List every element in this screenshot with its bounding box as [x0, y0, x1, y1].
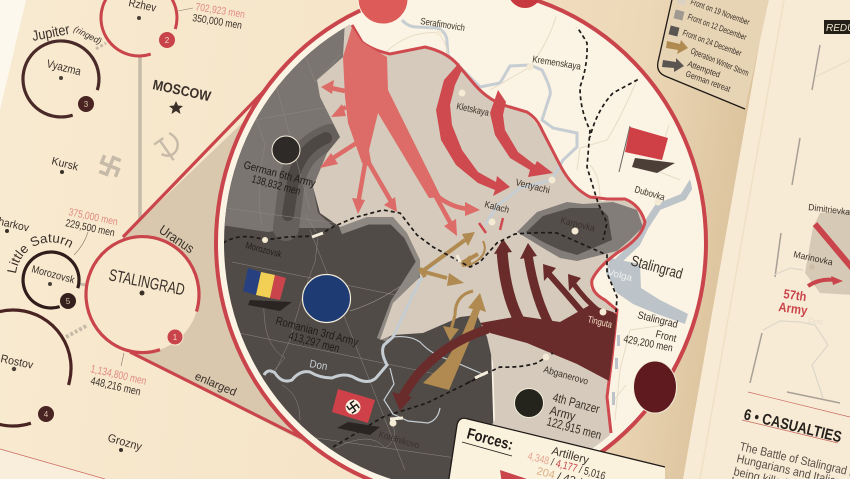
Rzhev casualties: [178, 1, 246, 32]
enlargement wedge from Stalingrad to the big map: [123, 10, 362, 445]
railway crossing marks: [312, 233, 488, 419]
flag: Soviet Union: [619, 126, 675, 173]
Stalingrad pocket at Karpovka: [517, 202, 643, 261]
map labels: Kletskaya: [455, 101, 491, 119]
icon: swastika in gray: [98, 154, 122, 178]
army label: 4th Panzer Army: Army: [548, 403, 578, 424]
army label: Stalingrad Front: Front: [654, 328, 678, 345]
flag: Nazi Germany: [332, 389, 380, 435]
legend labels: Front on 12 December: [686, 11, 748, 42]
Soviet offensive north trunk with branches: [320, 27, 480, 236]
Rzhev circle: 2: [165, 36, 170, 45]
Kursk: Kursk: [50, 155, 80, 174]
6th Army pocket finger: [286, 137, 330, 228]
Little Saturn casualties: [64, 206, 119, 255]
Chir tributaries: [384, 337, 485, 423]
Little Saturn casualties: 229,500 men: [64, 217, 116, 239]
Soviet Kletskaya arcs: [436, 63, 553, 196]
Stalingrad circle: Uranus: [156, 222, 197, 256]
Vyazma circle: Jupiter: [31, 22, 71, 45]
Stalingrad circle: [86, 222, 199, 353]
Rostov circle: Rostov: [0, 353, 34, 372]
Forces panel: Artillery: [550, 445, 590, 467]
Vyazma circle: Vyazma: [45, 58, 83, 79]
army marker: Romanian 3rd Army: [302, 274, 350, 322]
army label: 4th Panzer Army: 122,915 men: [545, 414, 603, 442]
strategic connector lines: [66, 43, 140, 337]
army label: Romanian 3rd Army: Romanian 3rd Army: [274, 315, 360, 349]
map grid and roads on dark terrain: [225, 55, 470, 470]
Don river: [264, 263, 437, 382]
town markers: [262, 30, 662, 426]
Stalingrad city label: Stalingrad: [629, 252, 685, 283]
legend box: [658, 0, 770, 109]
Stalingrad casualties and enlarged note: 448,216 men: [89, 375, 142, 398]
army label: Stalingrad Front: 429,200 men: [622, 333, 674, 355]
right page: pocket map: 57th: [783, 286, 807, 304]
front on 12 December gray area: [224, 25, 349, 232]
map labels: Vertyachi: [514, 177, 551, 196]
legend labels: [681, 0, 751, 94]
Vyazma circle: [23, 22, 103, 117]
Moscow label and star: MOSCOW: [151, 76, 213, 104]
Rostov circle: [0, 310, 71, 426]
legend labels: Attempted: [686, 58, 722, 80]
Morozovsk circle: Morozovsk: [30, 263, 76, 286]
Little Saturn casualties: 375,000 men: [67, 206, 119, 228]
map labels: Dubovka: [633, 184, 667, 204]
big map disc ring: [216, 0, 706, 479]
map labels: Kotelnikovo: [377, 429, 421, 451]
tan front on 19 November: [313, 20, 645, 479]
army label: German 6th Army: 138,832 men: [250, 173, 302, 198]
right page: reduced map edge: [750, 45, 850, 403]
Winter Storm tan arrows: [420, 232, 486, 390]
army marker: German 6th Army: [272, 136, 300, 164]
right page: casualties section: [729, 392, 850, 479]
right page: pocket map: Marinovka: [793, 249, 834, 267]
map labels: Tinguta: [586, 314, 614, 331]
army marker: 4th Panzer Army: [514, 388, 544, 418]
Volga river: [606, 180, 692, 405]
legend labels: Operation Winter Storm: [689, 46, 750, 78]
Rzhev casualties: 702,923 men: [195, 1, 246, 21]
northern Don river: [402, 20, 577, 225]
map labels: Kalach: [483, 199, 510, 216]
army label: German 6th Army: German 6th Army: [242, 159, 317, 190]
army label: Stalingrad Front: [622, 309, 679, 355]
army label: 4th Panzer Army: 4th Panzer: [551, 390, 601, 416]
Stalingrad circle: STALINGRAD: [107, 266, 186, 299]
legend swatches: [662, 0, 688, 72]
army label: Stalingrad Front: Stalingrad: [636, 309, 679, 331]
Soviet front line: [352, 25, 645, 433]
Morozovsk circle: Little Saturn: [7, 234, 72, 273]
Forces panel: [448, 418, 665, 479]
map labels: Don: [308, 358, 328, 373]
legend labels: Front on 24 December: [681, 27, 743, 58]
pale roads on the white area: [386, 8, 680, 420]
Vyazma circle: 3: [84, 100, 89, 109]
map labels: Kremenskaya: [532, 54, 582, 73]
army label: Romanian 3rd Army: 413,297 men: [287, 330, 341, 355]
army marker: Stalingrad Front: [634, 361, 676, 413]
icon: hammer and sickle: [152, 131, 180, 160]
map labels: Volga: [606, 267, 634, 284]
Stalingrad casualties and enlarged note: enlarged: [193, 371, 238, 399]
Morozovsk circle: 5: [66, 297, 71, 306]
right page: pocket map: [763, 202, 850, 398]
big map terrain and fronts: [200, 0, 700, 479]
outer band of the 12 December front: [340, 219, 422, 340]
top red army circles: [358, 0, 542, 24]
right page: pocket map: Army: [778, 299, 809, 318]
Small red marks near Kalach: [479, 218, 503, 233]
Vyazma circle: (ringed): [72, 24, 103, 46]
Soviet southern offensive brown arrows: [392, 239, 617, 411]
dashed railway lines: [223, 7, 650, 447]
right page: pocket map: Don: [808, 316, 824, 327]
map labels: [244, 16, 667, 451]
map labels: Karpovka: [559, 215, 596, 235]
legend labels: German retreat: [684, 68, 732, 94]
Rzhev circle: [101, 0, 177, 56]
Stalingrad casualties and enlarged note: 1,134,800 men: [89, 363, 148, 388]
map labels: Serafimovich: [420, 16, 466, 34]
Forces panel: Forces:: [465, 425, 515, 454]
dark German-held terrain: [224, 24, 494, 479]
army label: 4th Panzer Army: [546, 394, 601, 440]
map labels: Abganerovo: [542, 364, 589, 388]
Morozovsk circle: [7, 234, 81, 310]
Stalingrad casualties and enlarged note: [89, 353, 238, 399]
flag: Romania: [243, 268, 292, 311]
map labels: Morozovsk: [244, 240, 283, 261]
Grozny: Grozny: [106, 432, 143, 454]
Stalingrad circle: 1: [173, 333, 178, 342]
Rzhev casualties: 350,000 men: [192, 12, 243, 32]
Rostov circle: 4: [44, 410, 49, 419]
